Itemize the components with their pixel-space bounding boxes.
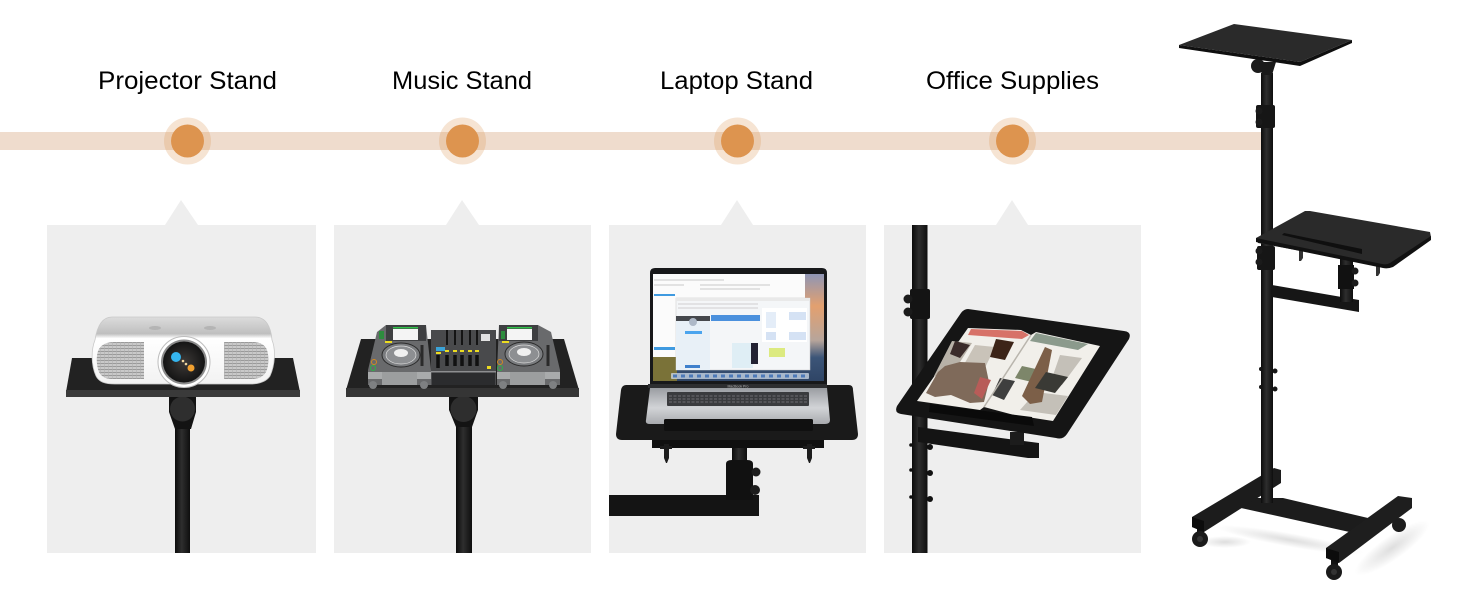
panel: office supplies bbox=[884, 200, 1141, 553]
arm and post bbox=[609, 446, 760, 516]
label: Office Supplies: Office Supplies bbox=[926, 67, 1099, 95]
icon: DJ controller bbox=[368, 325, 560, 389]
icon: open book bbox=[917, 328, 1100, 421]
panel: projector stand bbox=[47, 200, 316, 553]
support arm bbox=[918, 427, 1039, 458]
shelf bbox=[66, 358, 300, 397]
left deck bbox=[368, 325, 431, 389]
timeline marker 1 bbox=[164, 118, 211, 164]
right deck bbox=[497, 325, 560, 389]
second plate bbox=[1256, 211, 1431, 268]
panel: laptop stand bbox=[609, 200, 866, 553]
table top bbox=[616, 385, 858, 440]
tilted tray bbox=[896, 309, 1130, 438]
icon: laptop bbox=[646, 268, 830, 424]
timeline marker 2 bbox=[439, 118, 486, 164]
label: Music Stand: Music Stand bbox=[392, 67, 532, 95]
side arm and second post bbox=[1272, 250, 1380, 312]
shelf bbox=[346, 339, 579, 397]
top plate bbox=[1179, 24, 1352, 75]
book ledge bbox=[929, 404, 1034, 426]
laptop retaining ridge bbox=[664, 419, 813, 431]
product: full height stand bbox=[1179, 24, 1436, 584]
timeline marker 3 bbox=[714, 118, 761, 164]
mixer bbox=[431, 330, 496, 385]
bracket and screws bbox=[652, 438, 824, 463]
pole and clamps bbox=[904, 225, 933, 553]
floor shadows bbox=[1199, 512, 1436, 584]
main column bbox=[1256, 73, 1278, 503]
label: Projector Stand: Projector Stand bbox=[98, 67, 277, 95]
label: Laptop Stand: Laptop Stand bbox=[660, 67, 813, 95]
icon: projector bbox=[92, 317, 274, 388]
timeline marker 4 bbox=[989, 118, 1036, 164]
icon: laptop: MacBook Pro bbox=[727, 384, 749, 388]
base and casters bbox=[1192, 468, 1412, 580]
pole and joint bbox=[449, 396, 478, 553]
panel: music stand bbox=[334, 200, 591, 553]
timeline band bbox=[0, 132, 1261, 150]
pole and joint bbox=[169, 396, 196, 553]
